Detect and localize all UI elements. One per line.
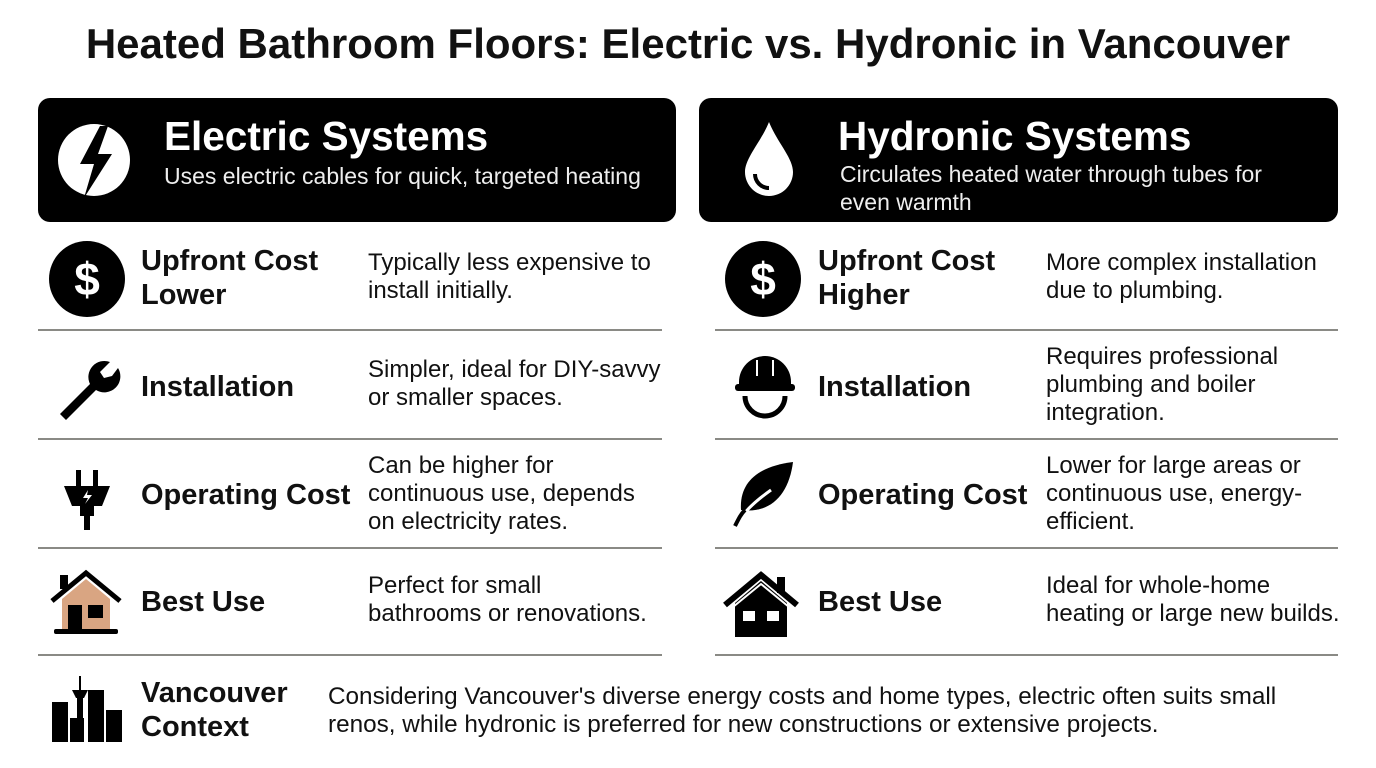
icon: hard hat bbox=[735, 356, 795, 418]
icon: house bbox=[723, 571, 799, 637]
row: hydronic installation bbox=[735, 343, 1278, 426]
row: hydronic upfront cost: Higher bbox=[818, 279, 910, 311]
row: electric installation: Simpler, ideal for DIY-savvy bbox=[368, 356, 661, 383]
icon: dollar: $ bbox=[750, 253, 776, 305]
row: electric best use bbox=[50, 570, 647, 634]
row: electric installation bbox=[60, 356, 661, 420]
row: electric upfront cost: Upfront Cost bbox=[141, 245, 318, 277]
row: electric upfront cost: install initially. bbox=[368, 277, 513, 304]
row: hydronic operating cost bbox=[733, 452, 1302, 535]
row: electric best use: Best Use bbox=[141, 586, 265, 618]
icon: dollar: $ bbox=[74, 253, 100, 305]
row: electric installation: or smaller spaces. bbox=[368, 384, 563, 411]
row: electric upfront cost: Typically less expensive to bbox=[368, 249, 651, 276]
panel: electric header bbox=[38, 98, 676, 222]
row: hydronic installation: Installation bbox=[818, 371, 971, 403]
icon: lightning bbox=[58, 124, 130, 196]
panel: hydronic header bbox=[699, 98, 1338, 222]
row: hydronic best use: heating or large new builds. bbox=[1046, 600, 1340, 627]
row: electric operating cost: Operating Cost bbox=[141, 479, 350, 511]
heading: electric: Electric Systems bbox=[164, 113, 488, 159]
row: hydronic upfront cost: More complex installation bbox=[1046, 249, 1317, 276]
row: electric operating cost bbox=[64, 452, 635, 535]
row: electric upfront cost: Lower bbox=[141, 279, 226, 311]
subtitle bbox=[840, 161, 1262, 215]
icon: dollar bbox=[725, 241, 801, 317]
row: vancouver context: Context bbox=[141, 711, 249, 743]
row: hydronic installation: plumbing and boiler bbox=[1046, 371, 1255, 398]
row: vancouver context bbox=[52, 676, 1276, 743]
row: hydronic installation: integration. bbox=[1046, 399, 1165, 426]
icon: city skyline bbox=[52, 676, 122, 742]
row: vancouver context: Vancouver bbox=[141, 677, 288, 709]
icon: house bbox=[50, 570, 122, 634]
row: hydronic upfront cost: due to plumbing. bbox=[1046, 277, 1223, 304]
row: hydronic operating cost: efficient. bbox=[1046, 508, 1135, 535]
icon: water drop bbox=[745, 122, 793, 196]
row: hydronic upfront cost: Upfront Cost bbox=[818, 245, 995, 277]
row: hydronic operating cost: Operating Cost bbox=[818, 479, 1027, 511]
row: electric best use: Perfect for small bbox=[368, 572, 541, 599]
row: electric operating cost: on electricity rates. bbox=[368, 508, 568, 535]
title: Heated Bathroom Floors: Electric vs. Hydronic in Vancouver bbox=[86, 20, 1290, 67]
row: hydronic best use: Ideal for whole-home bbox=[1046, 572, 1270, 599]
subtitle: even warmth bbox=[840, 189, 972, 215]
icon: dollar bbox=[49, 241, 125, 317]
heading: hydronic: Hydronic Systems bbox=[838, 113, 1191, 159]
icon: leaf bbox=[733, 462, 793, 527]
row: hydronic upfront cost bbox=[725, 241, 1317, 317]
icon: wrench bbox=[60, 361, 120, 420]
row: hydronic installation: Requires professional bbox=[1046, 343, 1278, 370]
row: vancouver context: renos, while hydronic is preferred for new constructions or extensive projects. bbox=[328, 711, 1159, 738]
row: electric best use: bathrooms or renovations. bbox=[368, 600, 647, 627]
subtitle: Circulates heated water through tubes for bbox=[840, 161, 1262, 187]
row: hydronic operating cost: continuous use, energy- bbox=[1046, 480, 1302, 507]
row: hydronic best use: Best Use bbox=[818, 586, 942, 618]
row: electric upfront cost bbox=[49, 241, 651, 317]
row: electric operating cost: continuous use, depends bbox=[368, 480, 635, 507]
row: electric operating cost: Can be higher for bbox=[368, 452, 553, 479]
row: hydronic best use bbox=[723, 571, 1340, 637]
subtitle: Uses electric cables for quick, targeted heating bbox=[164, 163, 641, 189]
icon: plug bbox=[64, 470, 110, 530]
row: vancouver context: Considering Vancouver's diverse energy costs and home types, electric often suits small bbox=[328, 683, 1276, 710]
row: electric installation: Installation bbox=[141, 371, 294, 403]
row: hydronic operating cost: Lower for large areas or bbox=[1046, 452, 1301, 479]
